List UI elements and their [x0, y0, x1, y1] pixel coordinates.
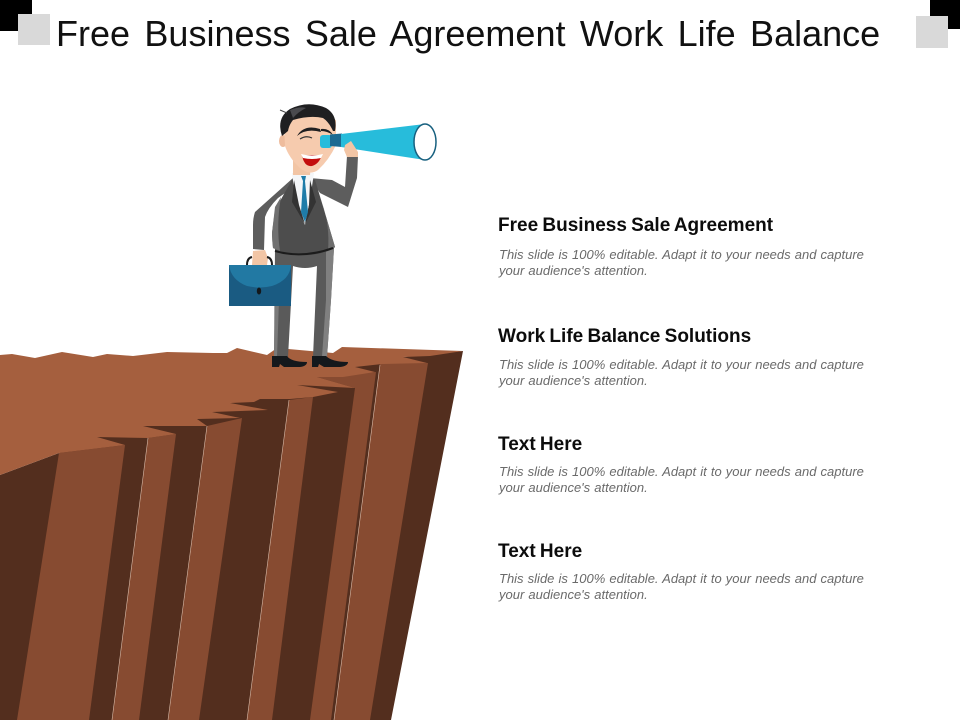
text block 1: [498, 215, 864, 278]
corner squares: top right: [916, 0, 960, 48]
belt: [275, 248, 333, 254]
body 2: [498, 357, 864, 388]
cliff: [0, 347, 463, 720]
body 3: This slide is 100% editable. Adapt it to your needs and capture: [499, 464, 864, 479]
briefcase: [229, 257, 291, 306]
left shoe: [272, 356, 307, 367]
text block 2: [498, 326, 864, 388]
body 1: your audience's attention.: [499, 263, 648, 278]
rock highlight lines: [112, 365, 380, 720]
body 4: This slide is 100% editable. Adapt it to your needs and capture: [499, 571, 864, 586]
telescope collar: [330, 134, 342, 147]
body 3: your audience's attention.: [499, 480, 648, 495]
body 4: [498, 571, 864, 602]
jacket: [272, 178, 335, 255]
body 4: your audience's attention.: [499, 587, 648, 602]
text block 4: [498, 541, 864, 602]
shirt: [292, 173, 314, 225]
right shoe: [312, 356, 348, 367]
briefcase flap: [229, 265, 291, 288]
right arm sleeve: [310, 156, 358, 207]
telescope: [320, 124, 436, 160]
lapels: [292, 180, 316, 224]
legs: [274, 248, 334, 357]
briefcase body: [229, 265, 291, 306]
heading 2: Work Life Balance Solutions: [498, 326, 751, 347]
body 2: your audience's attention.: [499, 373, 648, 388]
eyebrows: [297, 128, 321, 136]
telescope eyepiece: [320, 135, 332, 148]
heading 1: Free Business Sale Agreement: [498, 215, 773, 236]
hand on telescope: [344, 141, 358, 157]
telescope cone: [341, 124, 425, 160]
left arm sleeve: [253, 178, 295, 250]
hand holding briefcase: [252, 250, 268, 265]
briefcase clasp: [257, 288, 261, 294]
tie: [301, 176, 308, 222]
body 1: This slide is 100% editable. Adapt it to your needs and capture: [499, 247, 864, 262]
head: [279, 104, 336, 173]
body 2: This slide is 100% editable. Adapt it to your needs and capture: [499, 357, 864, 372]
hair tuft: [280, 110, 287, 113]
body 3: [498, 464, 864, 495]
cliff top surface: [0, 347, 463, 475]
text block 3: [498, 434, 864, 495]
ear: [279, 135, 287, 147]
briefcase handle: [247, 257, 272, 265]
cliff dark rock face: [0, 351, 463, 720]
closed eye: [300, 137, 312, 139]
corner squares: top left: [0, 0, 50, 45]
title: Free Business Sale Agreement Work Life Balance: [56, 13, 880, 54]
businessman: [229, 104, 436, 367]
heading 3: Text Here: [498, 434, 582, 455]
heading 4: Text Here: [498, 541, 582, 562]
mouth: [302, 155, 322, 166]
face: [284, 115, 336, 173]
cliff lighter rock strips: [17, 363, 428, 720]
neck: [293, 160, 311, 175]
body 1: [498, 247, 864, 278]
hair: [280, 104, 336, 136]
telescope lens: [414, 124, 436, 160]
